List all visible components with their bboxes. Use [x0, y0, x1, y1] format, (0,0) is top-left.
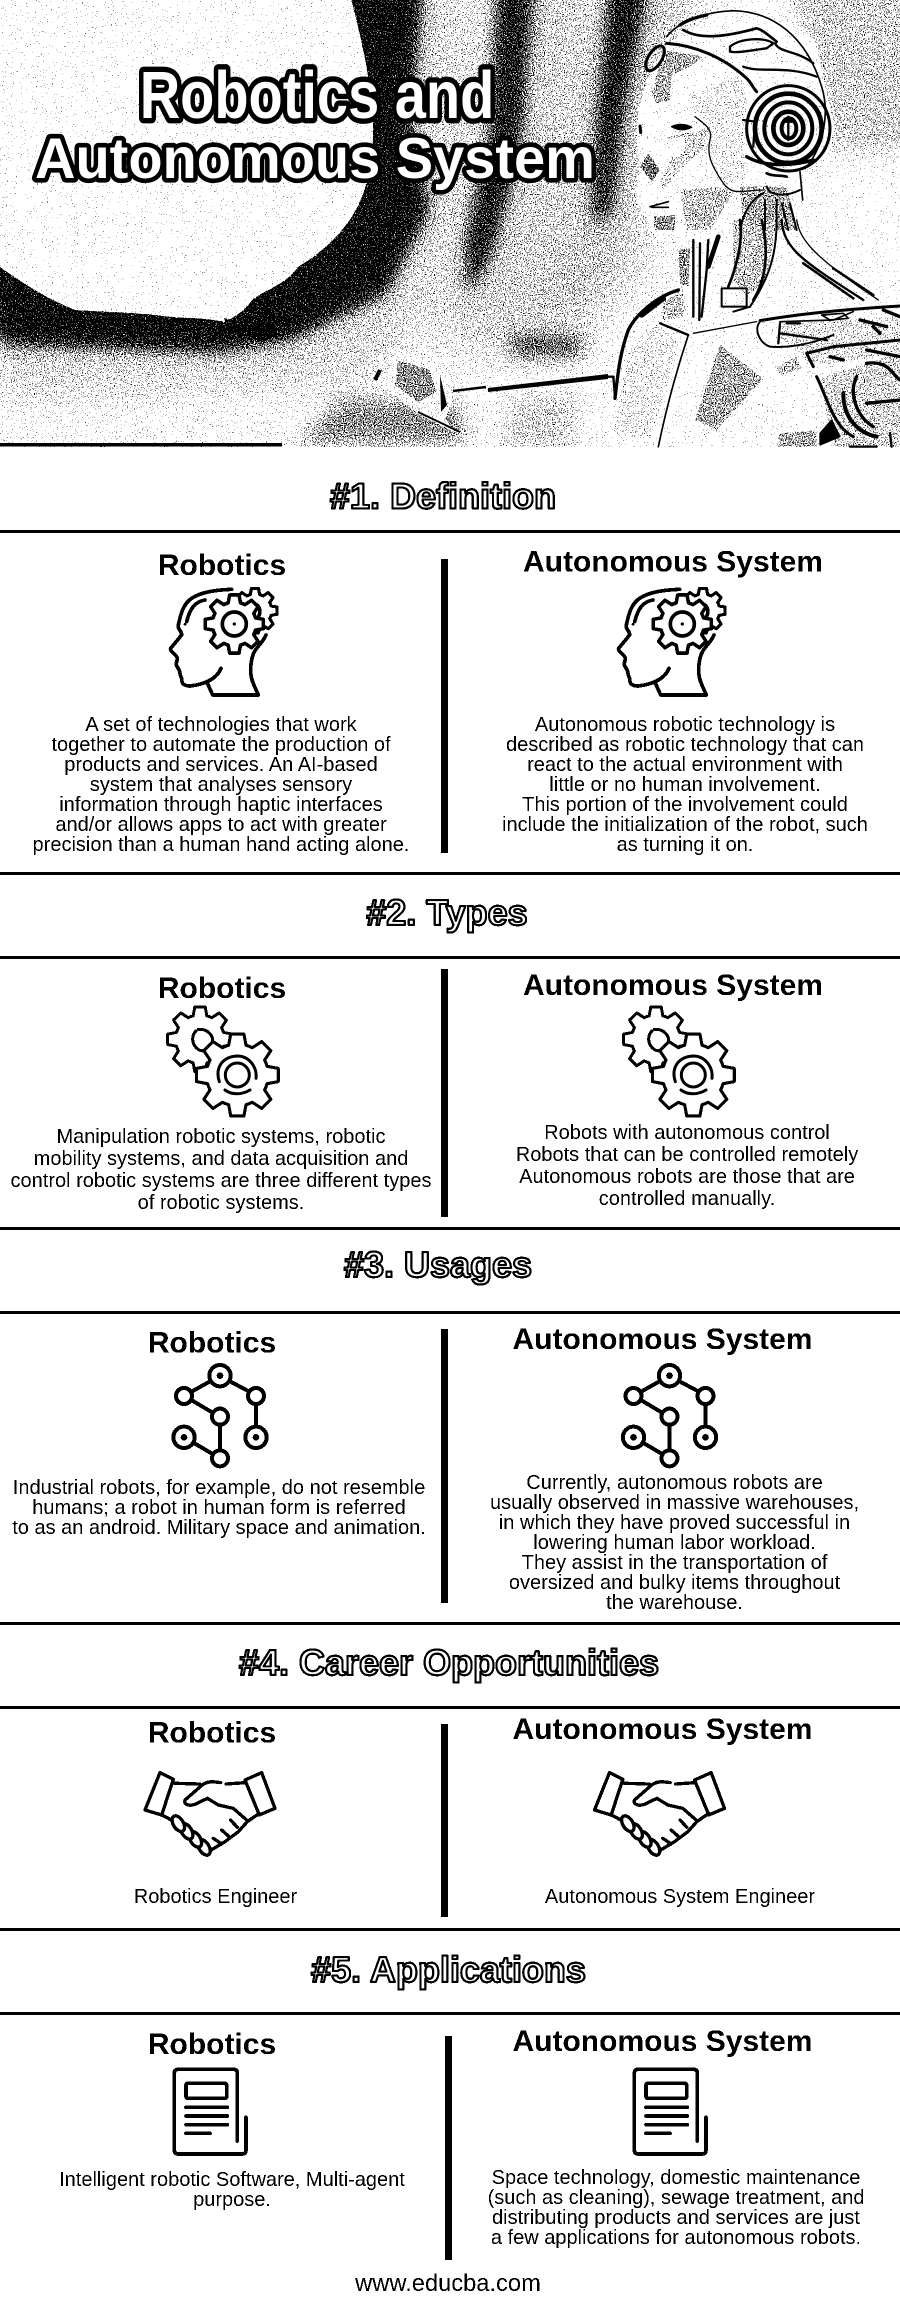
robotics column: definition	[33, 549, 409, 856]
robotics column: career: Robotics	[148, 1716, 276, 1750]
section 5: applications	[0, 1949, 900, 2260]
text: autonomous definition: little or no human involvement.	[549, 774, 821, 796]
text: robotics definition: products and services. An AI-based	[64, 754, 378, 776]
text: robotics usages	[12, 1477, 426, 1539]
text: robotics career: Robotics Engineer	[134, 1886, 298, 1908]
text: autonomous usages: usually observed in massive warehouses,	[490, 1492, 859, 1514]
autonomous column: types	[516, 969, 858, 1210]
section 2: types	[0, 892, 900, 1230]
icon: head with gears	[171, 589, 277, 695]
autonomous column: career: Autonomous System	[512, 1713, 813, 1746]
divider 2	[441, 969, 448, 1217]
hero background tones	[0, 0, 900, 470]
text: autonomous applications: (such as cleaning), sewage treatment, and	[488, 2187, 864, 2209]
text: autonomous definition: include the initialization of the robot, such	[502, 814, 868, 836]
autonomous column: career	[512, 1713, 815, 1908]
robotics column: applications	[59, 2028, 405, 2211]
heading: applications: #5. Applications	[311, 1949, 586, 1990]
text: autonomous applications: distributing products and services are just	[492, 2207, 860, 2229]
text: autonomous definition: This portion of the involvement could	[522, 794, 848, 816]
robot hand	[375, 348, 458, 432]
icon: two gears	[168, 1007, 278, 1116]
text: autonomous usages: lowering human labor workload.	[533, 1532, 816, 1554]
footer url: www.educba.com	[354, 2271, 541, 2297]
white moon shape	[0, 0, 373, 322]
robotics column: types: Robotics	[158, 972, 286, 1005]
icon: handshake	[145, 1773, 275, 1857]
title: Robotics and	[140, 58, 494, 133]
text: autonomous types: Robots with autonomous control	[544, 1122, 830, 1144]
divider 4	[441, 1724, 448, 1917]
text: robotics definition	[33, 714, 409, 856]
icon: document	[174, 2069, 246, 2154]
text: autonomous types	[516, 1122, 858, 1210]
text: autonomous definition: Autonomous robotic technology is	[535, 714, 835, 736]
text: robotics types: Manipulation robotic systems, robotic	[56, 1126, 386, 1148]
heading: usages: #3. Usages	[344, 1244, 532, 1285]
text: autonomous applications: Space technology, domestic maintenance	[492, 2167, 860, 2189]
autonomous column: types: Autonomous System	[523, 969, 823, 1002]
text: robotics definition: and/or allows apps to act with greater	[55, 814, 387, 836]
autonomous column: applications	[488, 2025, 864, 2249]
autonomous column: usages	[490, 1323, 859, 1614]
text: robotics usages: to as an android. Military space and animation.	[12, 1517, 426, 1539]
text: robotics types: mobility systems, and data acquisition and	[34, 1148, 408, 1170]
robotics column: career	[134, 1716, 298, 1908]
text: robotics types: of robotic systems.	[138, 1192, 304, 1214]
page body	[0, 476, 900, 2297]
text: autonomous definition	[502, 714, 868, 856]
bottom rule of hero	[0, 443, 282, 446]
autonomous column: applications: Autonomous System	[512, 2025, 813, 2058]
text: autonomous definition: react to the actual environment with	[527, 754, 843, 776]
text: robotics applications: Intelligent robotic Software, Multi-agent	[59, 2169, 405, 2191]
section 1: definition	[0, 476, 900, 875]
icon: two gears	[624, 1007, 734, 1116]
heading: types: #2. Types	[366, 892, 528, 933]
heading: definition: #1. Definition	[330, 476, 556, 516]
text: autonomous usages: oversized and bulky items throughout	[509, 1572, 841, 1594]
white face and torso	[612, 10, 900, 447]
text: autonomous definition: as turning it on.	[617, 834, 753, 856]
text: autonomous usages: in which they have proved successful in	[499, 1512, 850, 1534]
text: autonomous usages: Currently, autonomous robots are	[526, 1472, 823, 1494]
text: autonomous applications: a few applications for autonomous robots.	[491, 2227, 861, 2249]
text: robotics definition: together to automate the production of	[51, 734, 391, 756]
text: autonomous career: Autonomous System Engineer	[545, 1886, 815, 1908]
text: robotics applications	[59, 2169, 405, 2211]
divider 1	[441, 559, 448, 853]
text: autonomous types: Autonomous robots are those that are	[519, 1166, 855, 1188]
robot rod and hand marks	[375, 370, 608, 432]
hero illustration: dithered robot	[0, 0, 900, 470]
section 3: usages	[0, 1244, 900, 1625]
robotics column: usages: Robotics	[148, 1326, 276, 1360]
icon: head with gears	[619, 589, 725, 695]
divider 5	[445, 2036, 452, 2260]
robot neck and body line art	[600, 220, 900, 447]
text: robotics definition: information through haptic interfaces	[59, 794, 383, 816]
text: autonomous usages: the warehouse.	[606, 1592, 743, 1614]
title	[35, 58, 595, 191]
robot head line art	[640, 11, 830, 230]
text: autonomous types: controlled manually.	[599, 1188, 775, 1210]
robotics column: applications: Robotics	[148, 2028, 276, 2061]
autonomous column: usages: Autonomous System	[512, 1323, 813, 1356]
text: autonomous usages: They assist in the transportation of	[522, 1552, 828, 1574]
icon: node network	[173, 1365, 267, 1466]
heading: career opportunities: #4. Career Opportunities	[239, 1642, 659, 1683]
robotics column: usages	[12, 1326, 426, 1539]
autonomous column: definition: Autonomous System	[523, 546, 823, 578]
text: robotics definition: A set of technologies that work	[85, 714, 358, 736]
text: autonomous types: Robots that can be controlled remotely	[516, 1144, 858, 1166]
title: Autonomous System	[35, 127, 595, 191]
autonomous column: definition	[502, 546, 868, 856]
text: robotics types: control robotic systems are three different types	[11, 1170, 431, 1192]
text: robotics usages: humans; a robot in human form is referred	[32, 1497, 406, 1519]
robotics column: types	[11, 972, 431, 1214]
text: robotics definition: precision than a human hand acting alone.	[33, 834, 409, 856]
divider 3	[441, 1329, 448, 1603]
text: robotics applications: purpose.	[193, 2189, 271, 2211]
section 4: career opportunities	[0, 1642, 900, 1931]
robotics column: definition: Robotics	[158, 549, 286, 582]
icon: node network	[623, 1365, 716, 1466]
text: robotics types	[11, 1126, 431, 1214]
text: autonomous usages	[490, 1472, 859, 1614]
text: autonomous definition: described as robotic technology that can	[506, 734, 864, 756]
text: autonomous applications	[488, 2167, 864, 2249]
text: robotics definition: system that analyses sensory	[90, 774, 352, 796]
icon: handshake	[594, 1773, 724, 1857]
icon: document	[634, 2069, 706, 2154]
text: robotics usages: Industrial robots, for example, do not resemble	[13, 1477, 425, 1499]
